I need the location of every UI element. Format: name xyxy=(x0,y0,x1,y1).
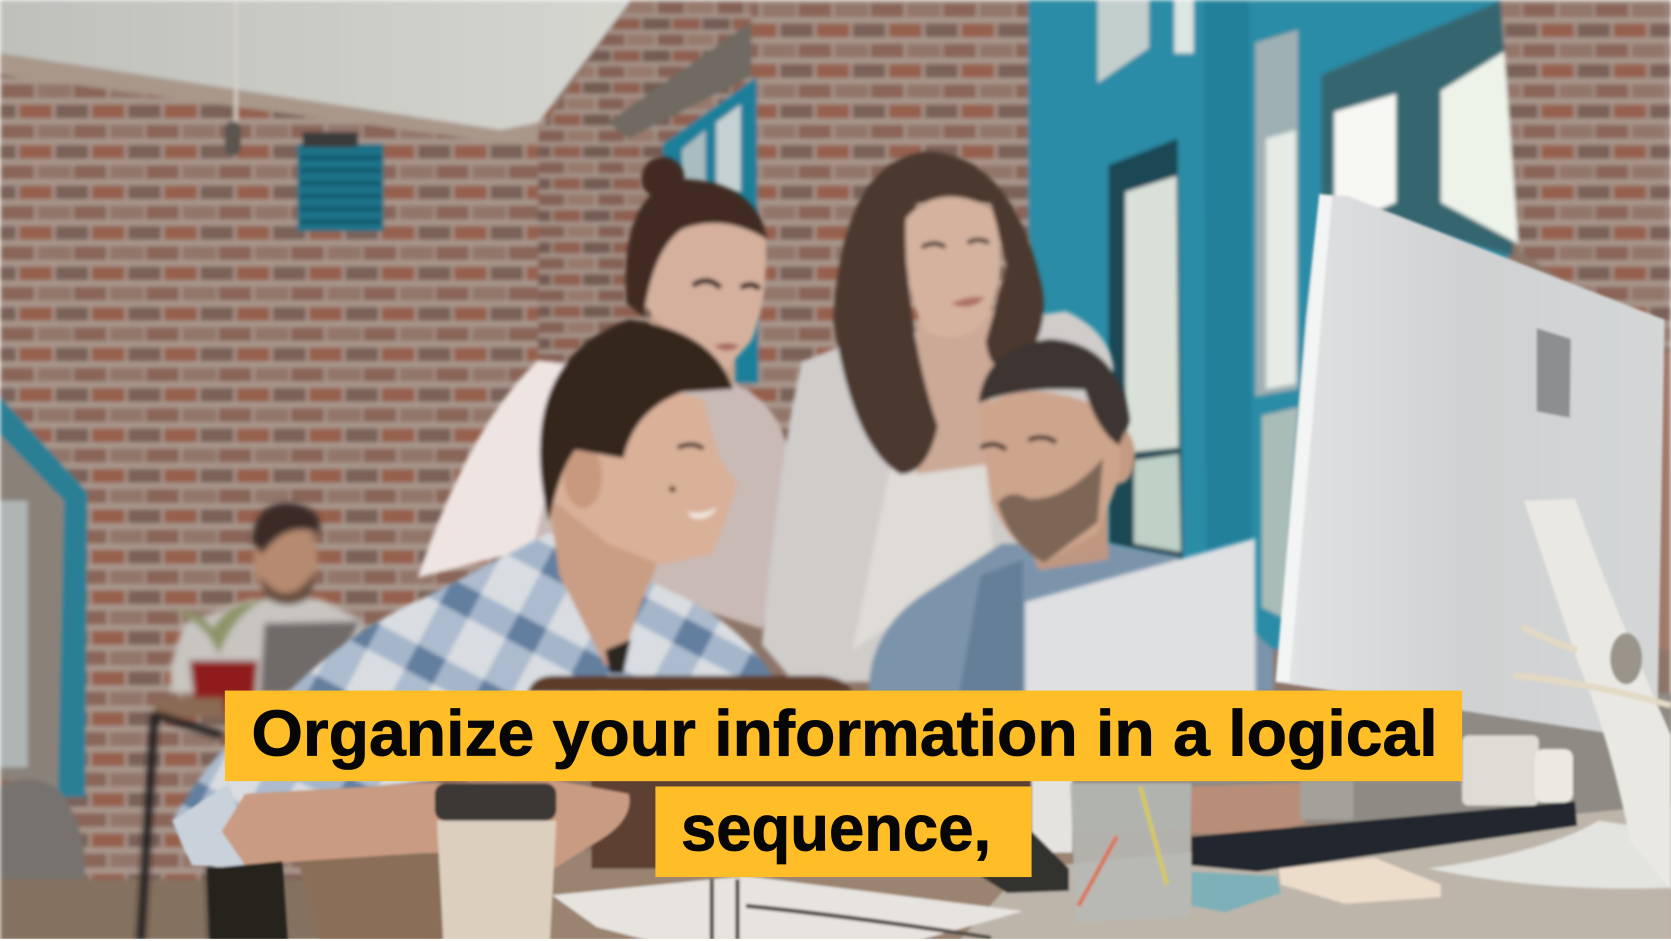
face xyxy=(978,392,1120,563)
coffee cup xyxy=(435,783,556,941)
shirt cuff on desk xyxy=(173,783,256,869)
window pane upper xyxy=(1174,0,1194,53)
colleague head xyxy=(254,515,318,604)
eyes xyxy=(980,437,1056,450)
document held by man xyxy=(1025,538,1255,698)
man's hand xyxy=(1191,783,1305,833)
red plant pot xyxy=(190,661,258,714)
white cylinder xyxy=(1462,735,1539,806)
woman with long hair xyxy=(762,151,1114,682)
brown folder xyxy=(528,676,853,693)
man's sleeve cuff xyxy=(1300,781,1353,820)
chest and neck xyxy=(916,309,996,474)
stand foot xyxy=(1428,821,1671,889)
ceiling edge trim xyxy=(0,53,544,144)
blouse xyxy=(418,360,789,629)
man in denim shirt xyxy=(869,339,1273,693)
sticky pad xyxy=(1279,858,1441,904)
cardigan xyxy=(762,311,1114,682)
ear xyxy=(564,444,602,508)
window frame sash xyxy=(1204,0,1252,639)
brick wall far right lower xyxy=(1636,352,1671,650)
eye xyxy=(678,445,703,449)
lips xyxy=(714,343,740,351)
smile xyxy=(687,507,717,519)
caption xyxy=(225,691,1462,877)
table right light area xyxy=(959,805,1671,941)
window pane lower centre xyxy=(1134,454,1181,552)
notebook xyxy=(1191,872,1281,912)
desk shadow left xyxy=(298,853,442,941)
mole xyxy=(669,486,676,492)
stand hole xyxy=(1610,633,1642,684)
monitor back xyxy=(1276,194,1665,741)
desk top xyxy=(155,698,224,717)
window dark frame xyxy=(1108,139,1183,565)
white top xyxy=(853,465,993,650)
window pane top left xyxy=(1098,0,1149,83)
face xyxy=(554,384,737,565)
window pane bright 3 xyxy=(1441,51,1530,250)
desk and objects xyxy=(173,693,1671,941)
hair xyxy=(626,179,767,318)
grey bag on floor xyxy=(0,779,85,901)
forearm xyxy=(222,780,629,869)
wall beam xyxy=(607,21,755,139)
window pane dark surround xyxy=(1321,0,1513,256)
colleague shirt xyxy=(171,599,362,693)
laptop xyxy=(260,621,360,693)
keyboard xyxy=(1191,801,1577,872)
team of four xyxy=(173,151,1273,869)
brick wall left xyxy=(0,43,554,895)
colleague beard xyxy=(260,570,315,605)
brick wall centre xyxy=(538,0,757,554)
denim shirt xyxy=(869,543,1273,693)
face xyxy=(639,223,766,371)
window lower pane xyxy=(1262,407,1298,618)
small window behind woman xyxy=(663,77,759,384)
background colleague at desk xyxy=(141,503,362,941)
phone on desk xyxy=(980,831,1069,893)
neck xyxy=(650,298,735,389)
window panes right xyxy=(1255,30,1298,396)
glasses on papers xyxy=(712,879,991,941)
lips xyxy=(951,297,985,307)
caption line two xyxy=(655,786,1032,877)
neck xyxy=(1018,501,1108,570)
hair xyxy=(978,339,1130,445)
eyes xyxy=(693,281,760,289)
beard xyxy=(997,458,1103,563)
monitor left edge xyxy=(1276,194,1332,682)
caption line two: sequence, xyxy=(681,791,991,864)
plaid shirt xyxy=(173,533,776,869)
brick pillar xyxy=(751,0,1031,597)
computer monitor rear xyxy=(1276,194,1671,890)
young man in plaid shirt xyxy=(173,320,776,869)
brick wall right xyxy=(1500,0,1671,352)
papers on desk xyxy=(552,876,1023,941)
window pane bright 1 xyxy=(1266,130,1296,389)
ceiling xyxy=(0,0,631,130)
large teal window frame xyxy=(1028,0,1530,650)
ear xyxy=(1103,428,1135,484)
bun xyxy=(642,157,684,199)
hair xyxy=(540,320,733,522)
face xyxy=(906,197,1001,337)
small white cylinder xyxy=(1535,749,1573,802)
desk legs xyxy=(141,714,222,941)
blue air vent xyxy=(297,132,384,231)
white paper edge xyxy=(1032,778,1072,853)
folder between hands xyxy=(591,735,1039,869)
bottom edge strip xyxy=(0,939,1671,941)
neck xyxy=(549,501,666,666)
stand arm xyxy=(1524,499,1671,890)
long hair xyxy=(833,151,1044,474)
undershirt xyxy=(605,639,631,674)
woman with bun xyxy=(418,157,789,629)
eyes xyxy=(922,240,989,247)
monitor square detail xyxy=(1537,328,1571,418)
glass with pencils xyxy=(1070,783,1191,922)
arched doorway teal xyxy=(0,396,87,797)
area behind desk right xyxy=(1023,693,1671,831)
blouse highlight xyxy=(418,360,575,578)
denim shadow xyxy=(959,559,1023,693)
floor xyxy=(0,879,320,941)
table surface xyxy=(298,810,1671,941)
caption line one: Organize your information in a logical xyxy=(252,697,1438,770)
hanging lamp xyxy=(225,0,241,156)
window pane bright 2 xyxy=(1334,94,1396,229)
chair xyxy=(208,861,288,941)
window pane centre xyxy=(1125,176,1179,453)
plant xyxy=(171,599,266,655)
colleague hair xyxy=(252,503,320,554)
cable xyxy=(1513,627,1671,705)
